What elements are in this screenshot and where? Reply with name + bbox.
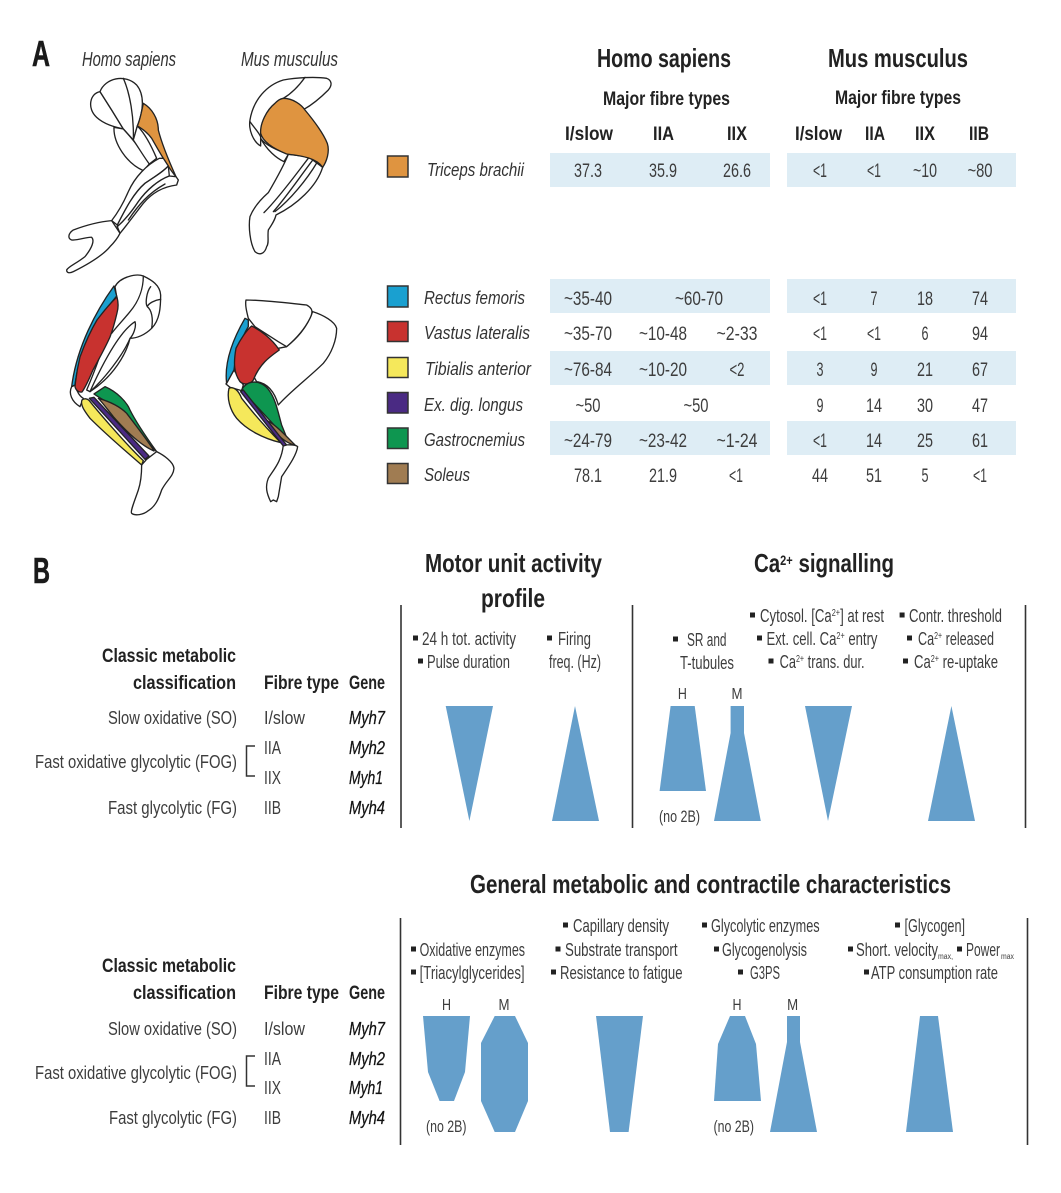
text: motor unit labels: Firing [558,629,591,649]
chart: capillary density wedge [596,1016,643,1132]
classification table, bottom: Fibre type [264,983,339,1004]
human fibre type values: 21.9 [649,466,677,487]
classification table, bottom: Myh2 [349,1048,386,1069]
chart: SR and T-tubules human vs mouse [659,686,761,826]
text: Ca2+ labels: 2+ [931,654,939,665]
muscle names: Vastus lateralis [424,322,530,343]
mouse fibre type values: 14 [866,431,882,452]
classification table, top [35,646,386,818]
text: capillary labels: Substrate transport [565,940,678,960]
table column headers: I/slow [565,124,613,145]
text: Ca2+ labels: Ext. cell. Ca [766,629,863,649]
text: glycogen labels: Short. velocity [856,940,938,960]
heading: Ca2+ signalling: Ca [754,548,787,578]
classification table, bottom: Myh1 [349,1077,383,1098]
classification table, bottom: Classic metabolic [102,956,236,977]
heading: General metabolic and contractile characteristics: General metabolic and contractile characteristics [470,869,951,899]
classification table, bottom: I/slow [264,1019,306,1039]
text: Ca2+ labels: T-tubules [680,653,734,673]
table column headers: IIX [915,124,935,145]
chart: glycolytic enzymes human vs mouse: (no 2B) [714,1117,754,1136]
chart: oxidative enzymes human vs mouse: (no 2B) [426,1117,466,1136]
text: Ca2+ labels: Ca [914,652,937,672]
text: glycogen labels: max, [938,952,953,961]
table row bands [550,153,1016,455]
text: glycogen labels [848,916,1014,983]
table column headers: I/slow [795,124,842,145]
chart: activity wedge [446,706,493,821]
classification table, top: I/slow [264,708,306,728]
classification table, bottom: Fast glycolytic (FG) [109,1108,237,1128]
text: Ca2+ labels: 2+ [836,631,845,642]
human fibre type values: ~76-84 [564,360,612,381]
classification table, top: IIA [264,738,281,758]
mouse fibre type values: <1 [813,289,827,310]
classification table, top: Fast oxidative glycolytic (FOG) [35,752,237,772]
chart: oxidative enzymes human vs mouse: M [498,997,510,1014]
classification table, bottom: IIA [264,1049,281,1069]
mouse fibre type values: 18 [917,289,933,310]
text: glycolytic labels [702,916,820,983]
mouse fibre type values: 44 [812,466,828,487]
classification table, bottom: Myh7 [349,1018,386,1039]
chart: SR and T-tubules human vs mouse: M [732,686,742,703]
text: Ca2+ labels: trans. dur. [804,652,865,672]
chart: firing frequency wedge [552,706,599,821]
human fibre type values [564,161,758,487]
classification table, top: IIX [264,768,281,788]
text: oxidative labels: Oxidative enzymes [420,940,525,960]
mouse fibre type values: 3 [816,360,824,381]
chart: glycolytic enzymes human vs mouse: M [787,997,798,1014]
human fibre type values: <2 [730,360,744,381]
classification table, top: classification [133,673,236,694]
chart: oxidative enzymes human vs mouse [423,997,528,1136]
mouse fibre type values: 6 [922,324,928,345]
illustration: mouse leg [226,300,337,502]
text: capillary labels: Capillary density [573,916,669,936]
human fibre type values: ~35-70 [564,324,612,345]
mouse fibre type values: <1 [867,324,881,345]
human fibre type values: ~10-20 [639,360,687,381]
mouse fibre type values: 21 [917,360,933,381]
text: glycogen labels: [Glycogen] [904,916,965,936]
legend swatches [388,156,408,484]
human fibre type values: ~10-48 [639,324,687,345]
mouse fibre type values: 9 [870,360,878,381]
text: motor unit labels: Pulse duration [427,652,510,672]
mouse fibre type values: 14 [866,396,882,417]
text: Ca2+ labels: ] at rest [840,606,884,626]
text: capillary labels [551,916,682,983]
sub-heading: mouse major fibre types: Major fibre types [835,88,961,109]
text: Ca2+ labels: Contr. threshold [909,606,1002,626]
classification table, bottom: Gene [349,983,385,1004]
classification table, top: Myh1 [349,767,383,788]
mouse fibre type values: <1 [973,466,987,487]
text: motor unit labels [413,629,601,672]
mouse fibre type values: <1 [813,431,827,452]
mouse fibre type values: 5 [922,466,928,487]
chart: contraction threshold wedge [928,706,975,821]
table column headers: IIA [865,124,885,145]
classification table, top: Fast glycolytic (FG) [108,798,237,818]
muscle names [424,159,532,485]
mouse fibre type values: 25 [917,431,933,452]
human fibre type values: ~35-40 [564,289,612,310]
mouse fibre type values: 9 [816,396,824,417]
classification table, top: Gene [349,673,385,694]
text: Ca2+ labels: entry [845,629,878,649]
chart: glycolytic enzymes human vs mouse: H [732,997,742,1014]
illustration: human leg [70,275,174,515]
text: Ca2+ labels: released [942,629,994,649]
text: glycogen labels: ATP consumption rate [871,963,998,983]
panel letter B: B [33,550,50,591]
mouse fibre type values: 67 [972,360,988,381]
panel letter A: A [32,33,50,74]
human fibre type values: <1 [729,466,743,487]
text: Ca2+ labels [673,606,1002,673]
text: Ca2+ labels: 2+ [934,631,942,642]
label: Mus musculus species: Mus musculus [241,49,338,71]
mouse fibre type values: <1 [813,161,827,182]
table heading: Homo sapiens: Homo sapiens [597,43,731,73]
human fibre type values: 78.1 [574,466,602,487]
human fibre type values: ~2-33 [716,324,758,345]
mouse fibre type values: ~80 [968,161,992,182]
text: glycogen labels: max [1001,952,1014,961]
table column headers: IIA [653,124,674,145]
classification table, top: Myh2 [349,737,386,758]
text: glycolytic labels: Glycogenolysis [722,940,807,960]
heading: Ca2+ signalling: 2+ [780,552,793,568]
classification table, bottom [35,956,386,1128]
mouse fibre type values: 51 [866,466,882,487]
classification table, top: Classic metabolic [102,646,236,667]
illustration: mouse arm [249,77,331,254]
chart: SR and T-tubules human vs mouse: (no 2B) [659,807,700,826]
human fibre type values: ~1-24 [716,431,758,452]
mouse fibre type values: 7 [870,289,878,310]
human fibre type values: 26.6 [723,161,751,182]
mouse fibre type values: <1 [867,161,881,182]
muscle names: Ex. dig. longus [424,394,523,415]
text: Ca2+ labels: Cytosol. [Ca [760,606,858,626]
classification table, bottom: Slow oxidative (SO) [108,1019,237,1039]
table column headers: IIB [969,124,989,145]
illustration: human arm [67,78,178,273]
table column headers: IIX [727,124,747,145]
mouse fibre type values: <1 [813,324,827,345]
chart: ATP consumption wedge [906,1016,953,1132]
muscle names: Gastrocnemius [424,429,525,450]
table column headers [565,124,989,145]
table heading: Mus musculus: Mus musculus [828,43,968,73]
muscle names: Tibialis anterior [425,358,532,379]
human fibre type values: ~23-42 [639,431,687,452]
human fibre type values: 35.9 [649,161,677,182]
text: glycolytic labels: Glycolytic enzymes [711,916,820,936]
mouse fibre type values: 47 [972,396,988,417]
classification table, bottom: IIX [264,1078,281,1098]
chart: SR and T-tubules human vs mouse: H [678,686,687,703]
sub-heading: human major fibre types: Major fibre types [603,89,730,110]
classification table, top: Myh7 [349,707,386,728]
classification table, top: Fibre type [264,673,339,694]
classification table, top: Slow oxidative (SO) [108,708,237,728]
classification table, bottom: Myh4 [349,1107,385,1128]
column dividers, top [401,605,1026,828]
muscle names: Rectus femoris [424,287,525,308]
heading: Motor unit activity profile: Motor unit activity [425,548,602,578]
text: Ca2+ labels: SR and [687,630,726,650]
text: motor unit labels: 24 h tot. activity [422,629,516,649]
classification table, bottom: IIB [264,1108,281,1128]
muscle names: Soleus [424,464,470,485]
human fibre type values: ~60-70 [675,289,723,310]
text: Ca2+ labels: 2+ [796,654,804,665]
text: capillary labels: Resistance to fatigue [560,963,682,983]
chart: glycolytic enzymes human vs mouse [714,997,817,1136]
heading: Motor unit activity profile [425,548,602,613]
text: oxidative labels: [Triacylglycerides] [420,963,525,983]
muscle names: Triceps brachii [427,159,525,180]
chart: oxidative enzymes human vs mouse: H [442,997,451,1014]
mouse fibre type values: 30 [917,396,933,417]
text: oxidative labels [411,940,525,983]
classification table, bottom: classification [133,983,236,1004]
mouse fibre type values [812,161,992,487]
column dividers, bottom [400,918,1028,1145]
chart: calcium transient wedge [805,706,852,821]
text: motor unit labels: freq. (Hz) [549,652,601,672]
human fibre type values: ~24-79 [564,431,612,452]
classification table, top: Myh4 [349,797,385,818]
human fibre type values: ~50 [684,396,708,417]
label: Homo sapiens species: Homo sapiens [82,49,176,71]
heading: Motor unit activity profile: profile [481,583,545,613]
text: glycolytic labels: G3PS [750,963,780,983]
heading: Ca2+ signalling: signalling [793,548,894,578]
text: Ca2+ labels: 2+ [832,608,840,619]
text: glycogen labels: Power [966,940,1000,960]
mouse fibre type values: 74 [972,289,988,310]
text: Ca2+ labels: re-uptake [939,652,998,672]
mouse fibre type values: 94 [972,324,988,345]
mouse fibre type values: ~10 [913,161,937,182]
classification table, bottom: Fast oxidative glycolytic (FOG) [35,1063,237,1083]
human fibre type values: ~50 [576,396,600,417]
mouse fibre type values: 61 [972,431,988,452]
text: Ca2+ labels: Ca [780,652,803,672]
human fibre type values: 37.3 [574,161,602,182]
classification table, top: IIB [264,798,281,818]
text: Ca2+ labels: Ca [918,629,941,649]
